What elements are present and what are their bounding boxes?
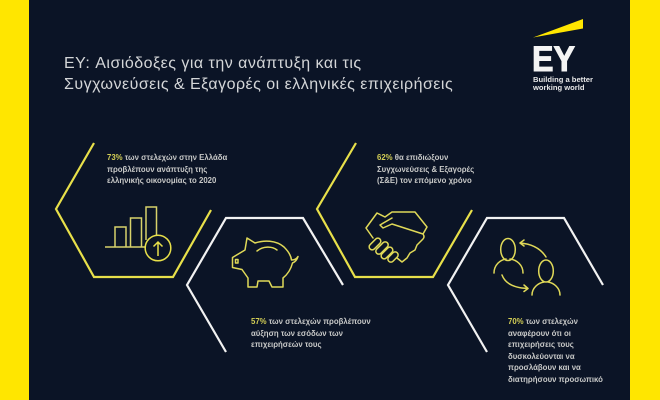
icon: handshake	[366, 212, 427, 263]
text: 62%: Συγχωνεύσεις & Εξαγορές	[377, 165, 474, 174]
logo tagline: working world	[533, 83, 584, 92]
text: 73%: ελληνικής οικονομίας το 2020	[107, 176, 216, 185]
hexagon: growth	[56, 143, 211, 277]
title: EY: Αισιόδοξες για την ανάπτυξη και τις	[64, 55, 362, 72]
logo letters EY: EY	[532, 40, 575, 79]
text: 70%: δυσκολεύονται να	[508, 352, 575, 361]
text: 57%: 57% των στελεχών προβλέπουν	[251, 317, 371, 326]
hexagon: revenue	[187, 218, 343, 352]
right yellow band	[630, 0, 660, 400]
title	[64, 55, 453, 92]
text: 73%: 73% των στελεχών στην Ελλάδα	[107, 153, 227, 162]
text: 70%: 70% των στελεχών	[508, 317, 578, 326]
text: 62%	[377, 153, 474, 185]
icon: bar chart with up arrow	[105, 207, 171, 261]
text: 70%: προσλάβουν και να	[508, 363, 581, 372]
logo tagline: Building a better	[533, 75, 593, 84]
text: 57%: επιχειρήσεών τους	[251, 340, 322, 349]
text: 70%: διατηρήσουν προσωπικό	[508, 375, 603, 384]
text: 73%	[107, 153, 228, 185]
hexagon: mergers	[317, 143, 472, 277]
icon: piggy bank	[232, 238, 298, 287]
text: 57%: αύξηση των εσόδων των	[251, 329, 343, 338]
text: 70%: επιχειρήσεις τους	[508, 340, 574, 349]
text: 62%: (Σ&Ε) τον επόμενο χρόνο	[377, 176, 472, 185]
left yellow band	[0, 0, 29, 400]
text: 70%	[508, 317, 603, 384]
hexagon: staff	[448, 218, 603, 352]
logo beam	[533, 19, 583, 38]
icon: two people with arrows	[494, 238, 560, 295]
EY logo	[532, 19, 593, 92]
text: 73%: προβλέπουν ανάπτυξη της	[107, 165, 207, 174]
title: Συγχωνεύσεις & Εξαγορές οι ελληνικές επιχειρήσεις	[64, 76, 453, 92]
text: 62%: 62% θα επιδιώξουν	[377, 153, 448, 162]
text: 57%	[251, 317, 371, 349]
text: 70%: αναφέρουν ότι οι	[508, 329, 571, 338]
logo tagline	[533, 75, 593, 92]
